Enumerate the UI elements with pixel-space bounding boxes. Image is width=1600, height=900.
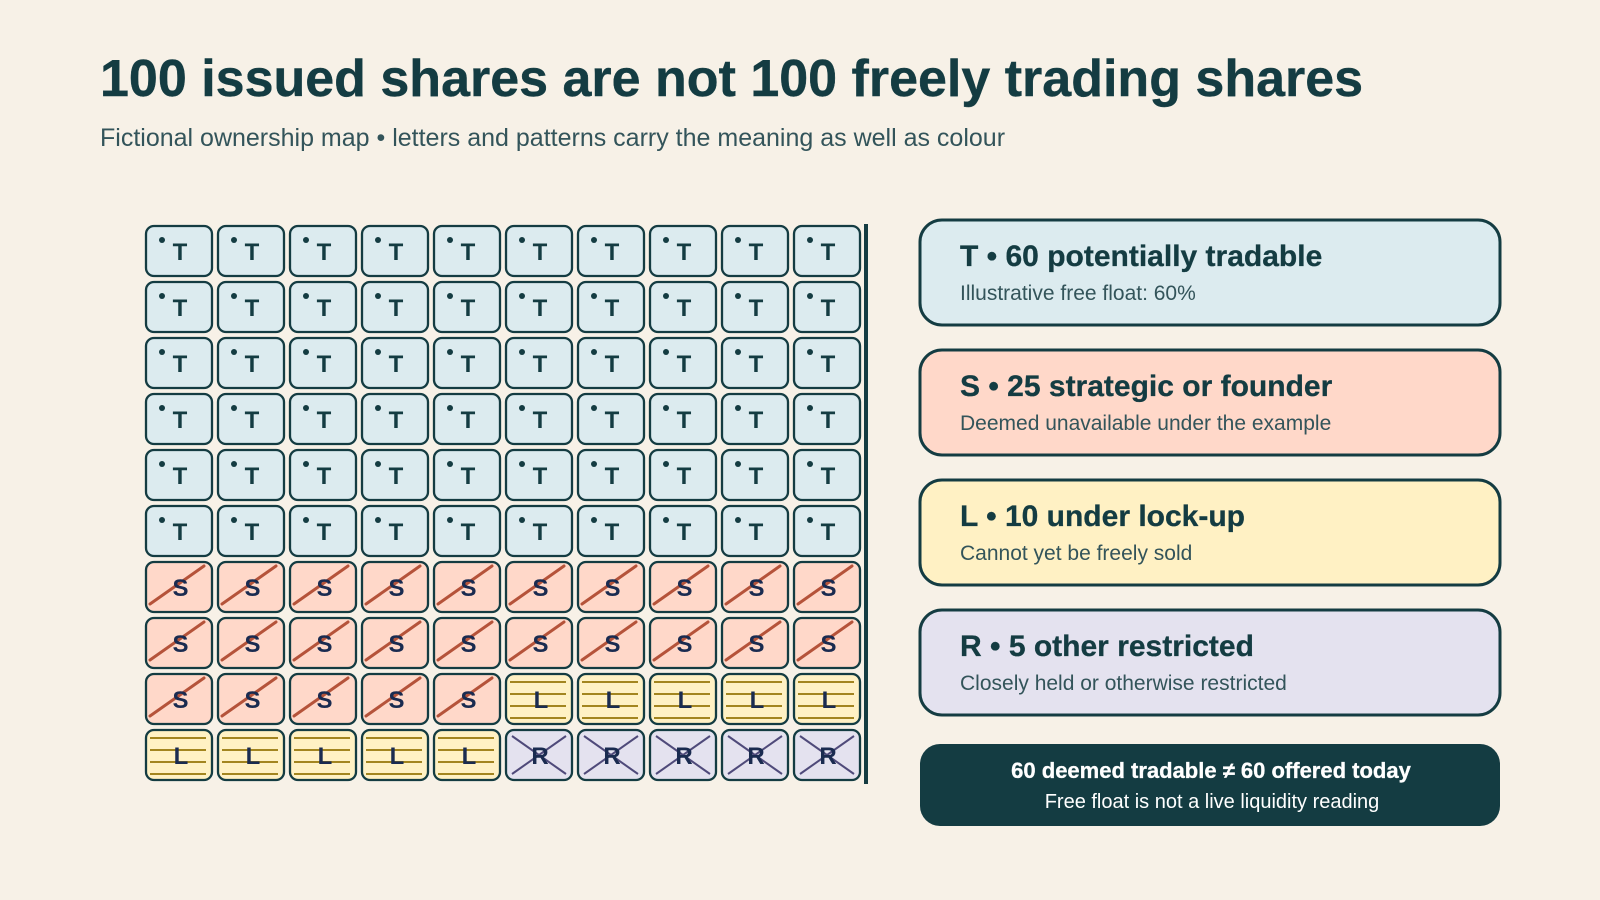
tradable shares: 60 T cells: T	[677, 407, 692, 434]
tradable shares: 60 T cells: T	[749, 407, 764, 434]
tradable shares: 60 T cells: T	[245, 239, 260, 266]
panel: R other restricted: Closely held or otherwise restricted	[960, 672, 1287, 695]
tradable shares: 60 T cells: T	[245, 295, 260, 322]
tradable shares: 60 T cells: T	[173, 463, 188, 490]
lock-up shares: 10 L cells: L	[174, 743, 188, 770]
callout: tradable is not offered	[920, 744, 1500, 826]
tradable shares: 60 T cells: T	[605, 295, 620, 322]
strategic shares: 25 S cells: S	[460, 687, 477, 714]
tradable shares: 60 T cells: T	[677, 463, 692, 490]
strategic shares: 25 S cells: S	[316, 631, 333, 658]
tradable shares: 60 T cells: T	[389, 463, 404, 490]
restricted shares: 5 R cells: R	[747, 743, 765, 770]
panel: T potentially tradable: T • 60 potentially tradable	[960, 240, 1322, 273]
subtitle: Fictional ownership map • letters and patterns carry the meaning as well as colour	[100, 124, 1005, 152]
tradable shares: 60 T cells: T	[317, 407, 332, 434]
strategic shares: 25 S cells	[146, 562, 860, 724]
restricted shares: 5 R cells: R	[603, 743, 621, 770]
tradable shares: 60 T cells: T	[533, 239, 548, 266]
tradable shares: 60 T cells: T	[533, 519, 548, 546]
tradable shares: 60 T cells: T	[461, 239, 476, 266]
lock-up shares: 10 L cells: L	[750, 687, 764, 714]
tradable shares: 60 T cells: T	[749, 295, 764, 322]
strategic shares: 25 S cells: S	[676, 575, 693, 602]
tradable shares: 60 T cells: T	[821, 519, 836, 546]
strategic shares: 25 S cells: S	[244, 575, 261, 602]
lock-up shares: 10 L cells: L	[462, 743, 476, 770]
strategic shares: 25 S cells: S	[820, 631, 837, 658]
tradable shares: 60 T cells: T	[821, 407, 836, 434]
lock-up shares: 10 L cells: L	[822, 687, 836, 714]
lock-up shares: 10 L cells	[146, 674, 860, 780]
tradable shares: 60 T cells: T	[173, 519, 188, 546]
strategic shares: 25 S cells: S	[820, 575, 837, 602]
lock-up shares: 10 L cells: L	[678, 687, 692, 714]
tradable shares: 60 T cells: T	[245, 351, 260, 378]
tradable shares: 60 T cells	[146, 226, 860, 556]
tradable shares: 60 T cells: T	[317, 463, 332, 490]
tradable shares: 60 T cells: T	[749, 239, 764, 266]
tradable shares: 60 T cells: T	[605, 407, 620, 434]
tradable shares: 60 T cells: T	[821, 463, 836, 490]
callout: tradable is not offered: 60 deemed tradable ≠ 60 offered today	[1011, 758, 1412, 783]
tradable shares: 60 T cells: T	[749, 519, 764, 546]
panel: L under lock-up: Cannot yet be freely sold	[960, 542, 1192, 565]
strategic shares: 25 S cells: S	[388, 631, 405, 658]
tradable shares: 60 T cells: T	[749, 463, 764, 490]
strategic shares: 25 S cells: S	[532, 631, 549, 658]
tradable shares: 60 T cells: T	[173, 351, 188, 378]
strategic shares: 25 S cells: S	[244, 631, 261, 658]
strategic shares: 25 S cells: S	[460, 631, 477, 658]
panel: T potentially tradable: Illustrative free float: 60%	[960, 282, 1196, 305]
strategic shares: 25 S cells: S	[604, 575, 621, 602]
tradable shares: 60 T cells: T	[389, 519, 404, 546]
strategic shares: 25 S cells: S	[532, 575, 549, 602]
lock-up shares: 10 L cells: L	[534, 687, 548, 714]
tradable shares: 60 T cells: T	[677, 239, 692, 266]
lock-up shares: 10 L cells: L	[606, 687, 620, 714]
restricted shares: 5 R cells: R	[531, 743, 549, 770]
strategic shares: 25 S cells: S	[676, 631, 693, 658]
restricted shares: 5 R cells: R	[819, 743, 837, 770]
strategic shares: 25 S cells: S	[316, 687, 333, 714]
strategic shares: 25 S cells: S	[388, 687, 405, 714]
tradable shares: 60 T cells: T	[461, 519, 476, 546]
panel: R other restricted: R • 5 other restricted	[960, 630, 1254, 663]
tradable shares: 60 T cells: T	[605, 519, 620, 546]
lock-up shares: 10 L cells: L	[390, 743, 404, 770]
restricted shares: 5 R cells	[506, 730, 860, 780]
grid boundary bar	[864, 224, 868, 784]
tradable shares: 60 T cells: T	[677, 351, 692, 378]
strategic shares: 25 S cells: S	[244, 687, 261, 714]
tradable shares: 60 T cells: T	[461, 295, 476, 322]
lock-up shares: 10 L cells: L	[318, 743, 332, 770]
panel: L under lock-up: L • 10 under lock-up	[960, 500, 1245, 533]
panel: S strategic or founder: S • 25 strategic or founder	[960, 370, 1333, 403]
tradable shares: 60 T cells: T	[173, 295, 188, 322]
tradable shares: 60 T cells: T	[245, 407, 260, 434]
tradable shares: 60 T cells: T	[245, 463, 260, 490]
panel: T potentially tradable	[920, 220, 1500, 325]
tradable shares: 60 T cells: T	[461, 407, 476, 434]
panel: R other restricted	[920, 610, 1500, 715]
tradable shares: 60 T cells: T	[677, 295, 692, 322]
tradable shares: 60 T cells: T	[389, 295, 404, 322]
panel: S strategic or founder: Deemed unavailable under the example	[960, 412, 1331, 435]
tradable shares: 60 T cells: T	[605, 239, 620, 266]
lock-up shares: 10 L cells: L	[246, 743, 260, 770]
panel: S strategic or founder	[920, 350, 1500, 455]
tradable shares: 60 T cells: T	[749, 351, 764, 378]
tradable shares: 60 T cells: T	[461, 463, 476, 490]
strategic shares: 25 S cells: S	[172, 575, 189, 602]
restricted shares: 5 R cells: R	[675, 743, 693, 770]
tradable shares: 60 T cells: T	[389, 351, 404, 378]
tradable shares: 60 T cells: T	[677, 519, 692, 546]
tradable shares: 60 T cells: T	[389, 407, 404, 434]
tradable shares: 60 T cells: T	[605, 463, 620, 490]
strategic shares: 25 S cells: S	[748, 631, 765, 658]
tradable shares: 60 T cells: T	[821, 351, 836, 378]
panel: L under lock-up	[920, 480, 1500, 585]
tradable shares: 60 T cells: T	[317, 351, 332, 378]
strategic shares: 25 S cells: S	[748, 575, 765, 602]
tradable shares: 60 T cells: T	[605, 351, 620, 378]
tradable shares: 60 T cells: T	[173, 239, 188, 266]
tradable shares: 60 T cells: T	[461, 351, 476, 378]
tradable shares: 60 T cells: T	[245, 519, 260, 546]
strategic shares: 25 S cells: S	[172, 631, 189, 658]
tradable shares: 60 T cells: T	[317, 239, 332, 266]
strategic shares: 25 S cells: S	[460, 575, 477, 602]
tradable shares: 60 T cells: T	[533, 295, 548, 322]
strategic shares: 25 S cells: S	[316, 575, 333, 602]
tradable shares: 60 T cells: T	[821, 295, 836, 322]
tradable shares: 60 T cells: T	[821, 239, 836, 266]
share grid: 100 shares	[146, 226, 860, 780]
callout: tradable is not offered: Free float is not a live liquidity reading	[1045, 791, 1379, 813]
tradable shares: 60 T cells: T	[533, 463, 548, 490]
strategic shares: 25 S cells: S	[604, 631, 621, 658]
tradable shares: 60 T cells: T	[173, 407, 188, 434]
strategic shares: 25 S cells: S	[172, 687, 189, 714]
strategic shares: 25 S cells: S	[388, 575, 405, 602]
tradable shares: 60 T cells: T	[389, 239, 404, 266]
tradable shares: 60 T cells: T	[533, 351, 548, 378]
title: 100 issued shares are not 100 freely trading shares	[100, 50, 1363, 108]
tradable shares: 60 T cells: T	[533, 407, 548, 434]
tradable shares: 60 T cells: T	[317, 519, 332, 546]
tradable shares: 60 T cells: T	[317, 295, 332, 322]
